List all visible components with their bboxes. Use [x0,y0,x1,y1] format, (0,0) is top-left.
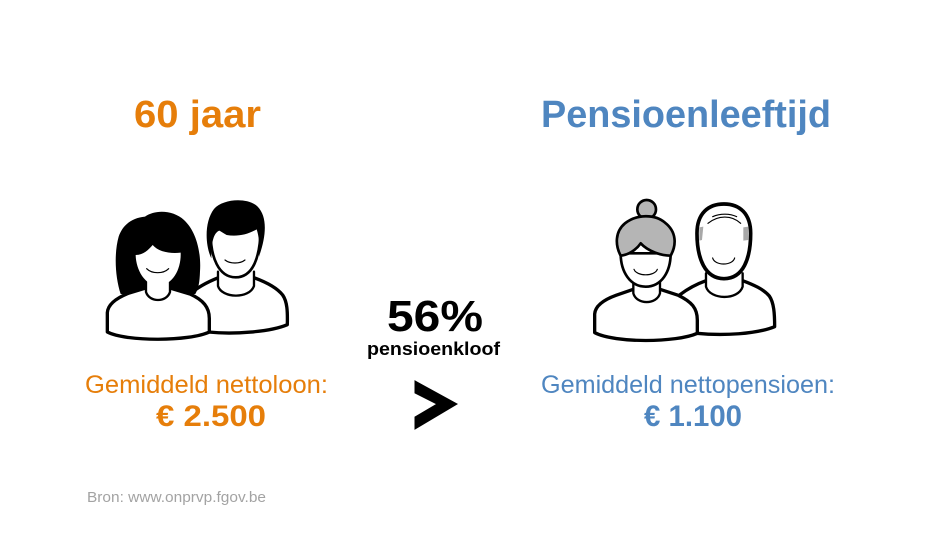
icon: elderly couple [595,200,775,340]
source note: Bron: www.onprvp.fgov.be [87,489,266,506]
woman [107,212,209,339]
heading: Pensioenleeftijd: Pensioenleeftijd [541,94,831,136]
man [190,200,287,333]
elderly man [680,204,775,334]
elderly woman [595,200,697,340]
arrow: greater than [415,381,457,429]
icon: young couple [107,200,287,339]
statistic: 56%: 56% [387,292,483,341]
label: pensioenkloof: pensioenkloof [367,339,501,359]
value: 2.500 euro: € 2.500 [156,400,266,433]
heading: 60 jaar: 60 jaar [134,94,261,136]
text: gemiddeld nettoloon: Gemiddeld nettoloon: [85,371,328,399]
value: 1.100 euro: € 1.100 [644,400,742,433]
text: gemiddeld nettopensioen: Gemiddeld nettopensioen: [541,371,835,399]
